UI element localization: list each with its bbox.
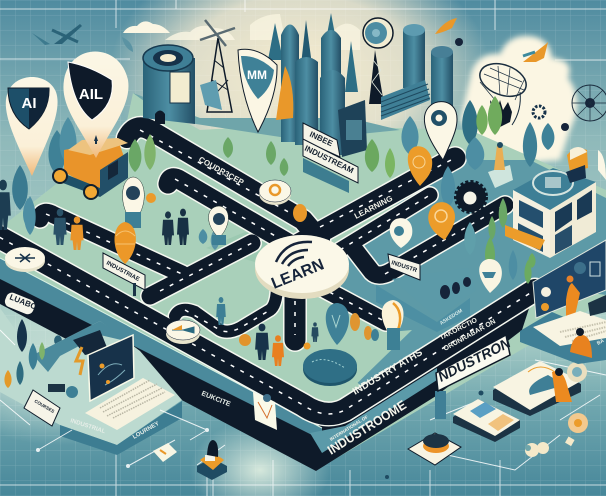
wall label: TAKORCTIO ORUNRABAR ON: ORUNRABAR ON [443, 318, 497, 353]
map pin: right side white [424, 102, 457, 160]
left stage with laptop: COURSES [34, 399, 55, 414]
central LEARN hub [255, 235, 349, 299]
central LEARN hub: LEARN [269, 256, 327, 293]
tanks and striped block [381, 24, 453, 120]
map pin: teal and lightbulb [311, 259, 502, 350]
right control screen and keyboard: BA [596, 338, 606, 347]
wall label: TAKORCTIO ORUNRABAR ON: TAKORCTIO [439, 317, 479, 342]
flat notebook [453, 399, 520, 442]
teal pond disc [303, 342, 357, 386]
road network [0, 127, 535, 414]
glass net and hand icon [475, 58, 531, 128]
drum building [143, 45, 195, 124]
pin: AIL [63, 52, 128, 158]
wall label: INDUSTRY ATHS: INDUSTRY ATHS [351, 347, 425, 398]
wall label: INDUSTROOME: INTERNATIONAL OF [329, 414, 369, 442]
white pin on road [390, 218, 412, 248]
platform surface [0, 93, 606, 462]
signboard: INDEE INDUSTREAM [303, 123, 358, 193]
sign: INDUSTRON [435, 334, 514, 419]
gear and wheel icons [533, 85, 606, 131]
inset teal platform with pins: ASKEDOM [439, 308, 464, 327]
lane signboard [103, 253, 145, 296]
skyline towers [268, 13, 367, 157]
signboard: INDEE INDUSTREAM: INBEE [308, 130, 335, 148]
road label: LEARNING: LEARNING [353, 194, 394, 221]
wall label: INDUSTROOME: INDUSTROOME [325, 397, 409, 458]
puck on card [408, 433, 461, 465]
orange power coin [428, 202, 455, 240]
orange vehicle [53, 138, 128, 199]
chart note pin [253, 392, 277, 430]
platform front walls [0, 247, 535, 471]
lane signboard: INDUSTRIAE [105, 260, 140, 283]
pin: MM shield: MM [247, 68, 267, 82]
pin: MM shield [238, 49, 293, 132]
orange disc pin [114, 222, 136, 264]
wall label: LUABC: LUABC [8, 293, 38, 311]
left stage with laptop: LOURNEY [132, 421, 160, 441]
seated student on stack [197, 440, 227, 480]
right upper building [505, 147, 606, 258]
wall label: EUKCITE: EUKCITE [200, 390, 232, 408]
inset teal platform with pins [376, 254, 476, 332]
left stage with laptop: INDUSTRIAL [69, 418, 106, 435]
open book with reader [493, 361, 581, 416]
road label: COUDR3CEP: COUDR3CEP [197, 155, 246, 187]
people on paths [0, 180, 284, 383]
right control screen and keyboard [520, 240, 606, 364]
inset teal platform with pins: INDUSTR [390, 260, 418, 274]
small note card [153, 443, 177, 462]
gear wheel [456, 182, 486, 212]
clouds [123, 14, 577, 165]
map pin: orange [408, 146, 432, 186]
pin: AI [6, 77, 58, 176]
teal trophy pedestal [488, 142, 513, 188]
wall label: LUABC [3, 291, 38, 316]
left stage with laptop [0, 308, 182, 455]
forest trees [12, 96, 554, 346]
timeline link lines [0, 330, 606, 470]
signboard: INDEE INDUSTREAM: INDUSTREAM [303, 144, 355, 175]
small lightbulb pins [122, 177, 228, 245]
pin: AIL: AIL [79, 86, 103, 103]
lattice windmill tower [200, 20, 235, 112]
small road discs [5, 180, 307, 344]
pin: AI: AI [22, 95, 36, 112]
plane icons [32, 18, 548, 62]
radar tower [363, 18, 393, 104]
right small gear nodes [385, 362, 588, 479]
sign: INDUSTRON: NDUSTRON [435, 334, 514, 385]
